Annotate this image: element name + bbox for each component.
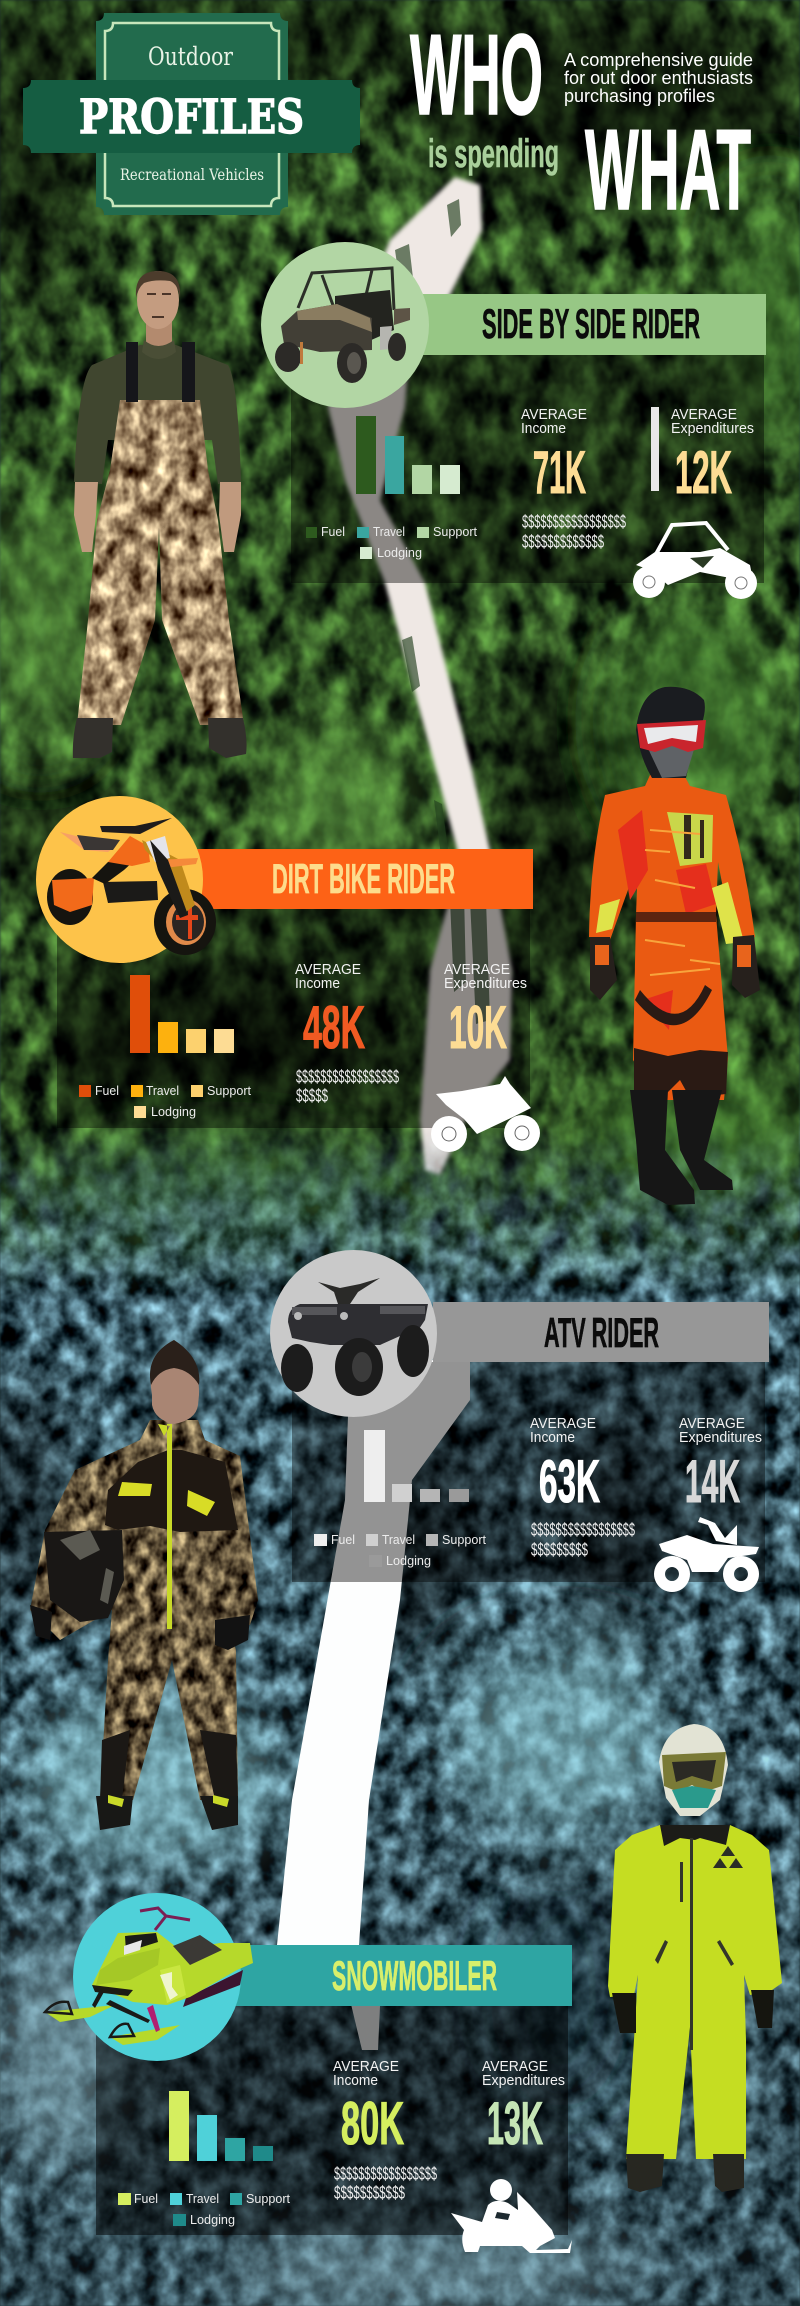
chart legend <box>306 524 477 560</box>
figure: atv rider <box>25 1340 265 1830</box>
average expenditures: AVERAGE <box>671 407 737 423</box>
title bar <box>197 849 533 909</box>
icon: dirt bike photo <box>47 818 216 955</box>
dollar signs <box>531 1520 635 1560</box>
chart legend: Fuel <box>95 1083 119 1098</box>
vehicle circle <box>36 796 203 963</box>
badge kicker: Outdoor <box>148 42 233 71</box>
average income <box>333 2059 404 2157</box>
plaque inner border <box>105 23 279 206</box>
average expenditures: AVERAGE <box>444 962 510 978</box>
header badge <box>23 13 360 215</box>
average income: Income <box>530 1430 575 1446</box>
average income <box>521 407 587 506</box>
average expenditures: AVERAGE <box>679 1416 745 1432</box>
title: ATV RIDER <box>544 1309 659 1356</box>
chart legend: Travel <box>373 524 405 539</box>
guide intro <box>564 49 753 106</box>
average income <box>295 962 365 1061</box>
icon: atv photo <box>281 1278 429 1396</box>
badge title: PROFILES <box>79 90 304 145</box>
average expenditures <box>482 2059 565 2157</box>
average income <box>530 1416 600 1515</box>
average expenditures: Expenditures <box>444 976 527 992</box>
chart legend: Travel <box>186 2191 219 2206</box>
title bar <box>423 294 766 355</box>
guide intro: A comprehensive guide <box>564 49 753 70</box>
average expenditures: 13K <box>487 2090 543 2157</box>
average income: AVERAGE <box>521 407 587 423</box>
bar chart <box>356 416 460 494</box>
chart legend: Lodging <box>377 545 422 560</box>
chart legend <box>79 1083 251 1119</box>
average income: 48K <box>303 994 365 1061</box>
headline <box>410 12 753 234</box>
average income: AVERAGE <box>333 2059 399 2075</box>
bar chart <box>169 2091 273 2161</box>
panel: snowmobiler <box>45 1893 572 2253</box>
dollar signs <box>296 1067 399 1106</box>
average expenditures: Expenditures <box>679 1430 762 1446</box>
chart legend: Support <box>246 2191 290 2206</box>
average expenditures: AVERAGE <box>482 2059 548 2075</box>
average expenditures: 10K <box>449 994 507 1061</box>
chart legend: Fuel <box>321 524 345 539</box>
dollar signs: $$$$$$$$$$$$$$$$$ <box>296 1067 399 1087</box>
dollar signs: $$$$$$$$$$$$$$$$$ <box>522 512 626 532</box>
ribbon <box>23 80 360 153</box>
chart legend: Travel <box>146 1083 179 1098</box>
average income: AVERAGE <box>295 962 361 978</box>
figure: snowmobiler <box>608 1724 782 2192</box>
panel: dirt bike rider <box>36 796 540 1152</box>
average expenditures: 14K <box>685 1448 740 1515</box>
chart legend: Fuel <box>331 1532 355 1547</box>
guide intro: for out door enthusiasts <box>564 67 753 88</box>
dollar signs: $$$$$$$$$$$$$ <box>522 532 604 552</box>
is spending: is spending <box>428 132 559 176</box>
average income: 63K <box>539 1448 600 1515</box>
chart legend: Support <box>207 1083 251 1098</box>
icon: side by side vehicle photo <box>275 268 410 383</box>
dollar signs: $$$$$$$$$$$$$$$$$ <box>334 2164 437 2184</box>
average income: 80K <box>341 2090 404 2157</box>
bar chart <box>364 1430 469 1502</box>
stats panel backdrop <box>57 909 530 1128</box>
title: DIRT BIKE RIDER <box>272 855 455 902</box>
icon: atv silhouette <box>654 1517 759 1592</box>
dollar signs <box>334 2164 437 2203</box>
average expenditures <box>671 407 754 506</box>
average expenditures <box>444 962 527 1061</box>
panel: atv rider <box>270 1250 769 1592</box>
average income: Income <box>333 2073 378 2089</box>
figure: dirt bike rider <box>589 687 760 1205</box>
average expenditures: 12K <box>675 439 732 506</box>
dollar signs: $$$$$$$$$$$ <box>334 2183 405 2203</box>
title bar <box>433 1302 769 1362</box>
dollar signs <box>522 512 626 552</box>
vehicle circle <box>73 1893 241 2061</box>
icon: quad silhouette <box>431 1076 540 1152</box>
stats panel backdrop <box>292 1362 765 1582</box>
title bar <box>236 1945 572 2006</box>
average income: Income <box>521 421 566 437</box>
icon: side by side silhouette <box>633 523 757 599</box>
icon: snowmobile silhouette <box>451 2179 572 2253</box>
average expenditures <box>679 1416 762 1515</box>
headline: WHO <box>410 12 543 139</box>
guide intro: purchasing profiles <box>564 85 715 106</box>
chart legend: Lodging <box>386 1553 431 1568</box>
stats panel backdrop <box>291 355 764 583</box>
stats panel backdrop <box>96 2006 568 2235</box>
dollar signs: $$$$$ <box>296 1086 328 1106</box>
chart legend: Travel <box>382 1532 415 1547</box>
vehicle circle <box>261 242 429 408</box>
vehicle circle <box>270 1250 437 1417</box>
panel: side by side rider: 71K <box>533 439 586 506</box>
average income: Income <box>295 976 340 992</box>
icon: snowmobile photo <box>45 1908 253 2045</box>
chart legend: Lodging <box>190 2212 235 2227</box>
chart legend: Support <box>433 524 477 539</box>
chart legend <box>118 2191 290 2227</box>
average expenditures: Expenditures <box>482 2073 565 2089</box>
average income: AVERAGE <box>530 1416 596 1432</box>
divider <box>651 407 659 491</box>
title: SNOWMOBILER <box>332 1952 497 1999</box>
chart legend: Support <box>442 1532 486 1547</box>
figure: side by side rider <box>70 271 250 758</box>
chart legend: Lodging <box>151 1104 196 1119</box>
chart legend: Fuel <box>134 2191 158 2206</box>
plaque <box>96 13 288 215</box>
dollar signs: $$$$$$$$$$$$$$$$$ <box>531 1520 635 1540</box>
panel: side by side rider <box>261 242 766 599</box>
badge subtitle: Recreational Vehicles <box>120 165 264 184</box>
dollar signs: $$$$$$$$$ <box>531 1540 588 1560</box>
chart legend <box>314 1532 486 1568</box>
bar chart <box>130 975 234 1053</box>
average expenditures: Expenditures <box>671 421 754 437</box>
